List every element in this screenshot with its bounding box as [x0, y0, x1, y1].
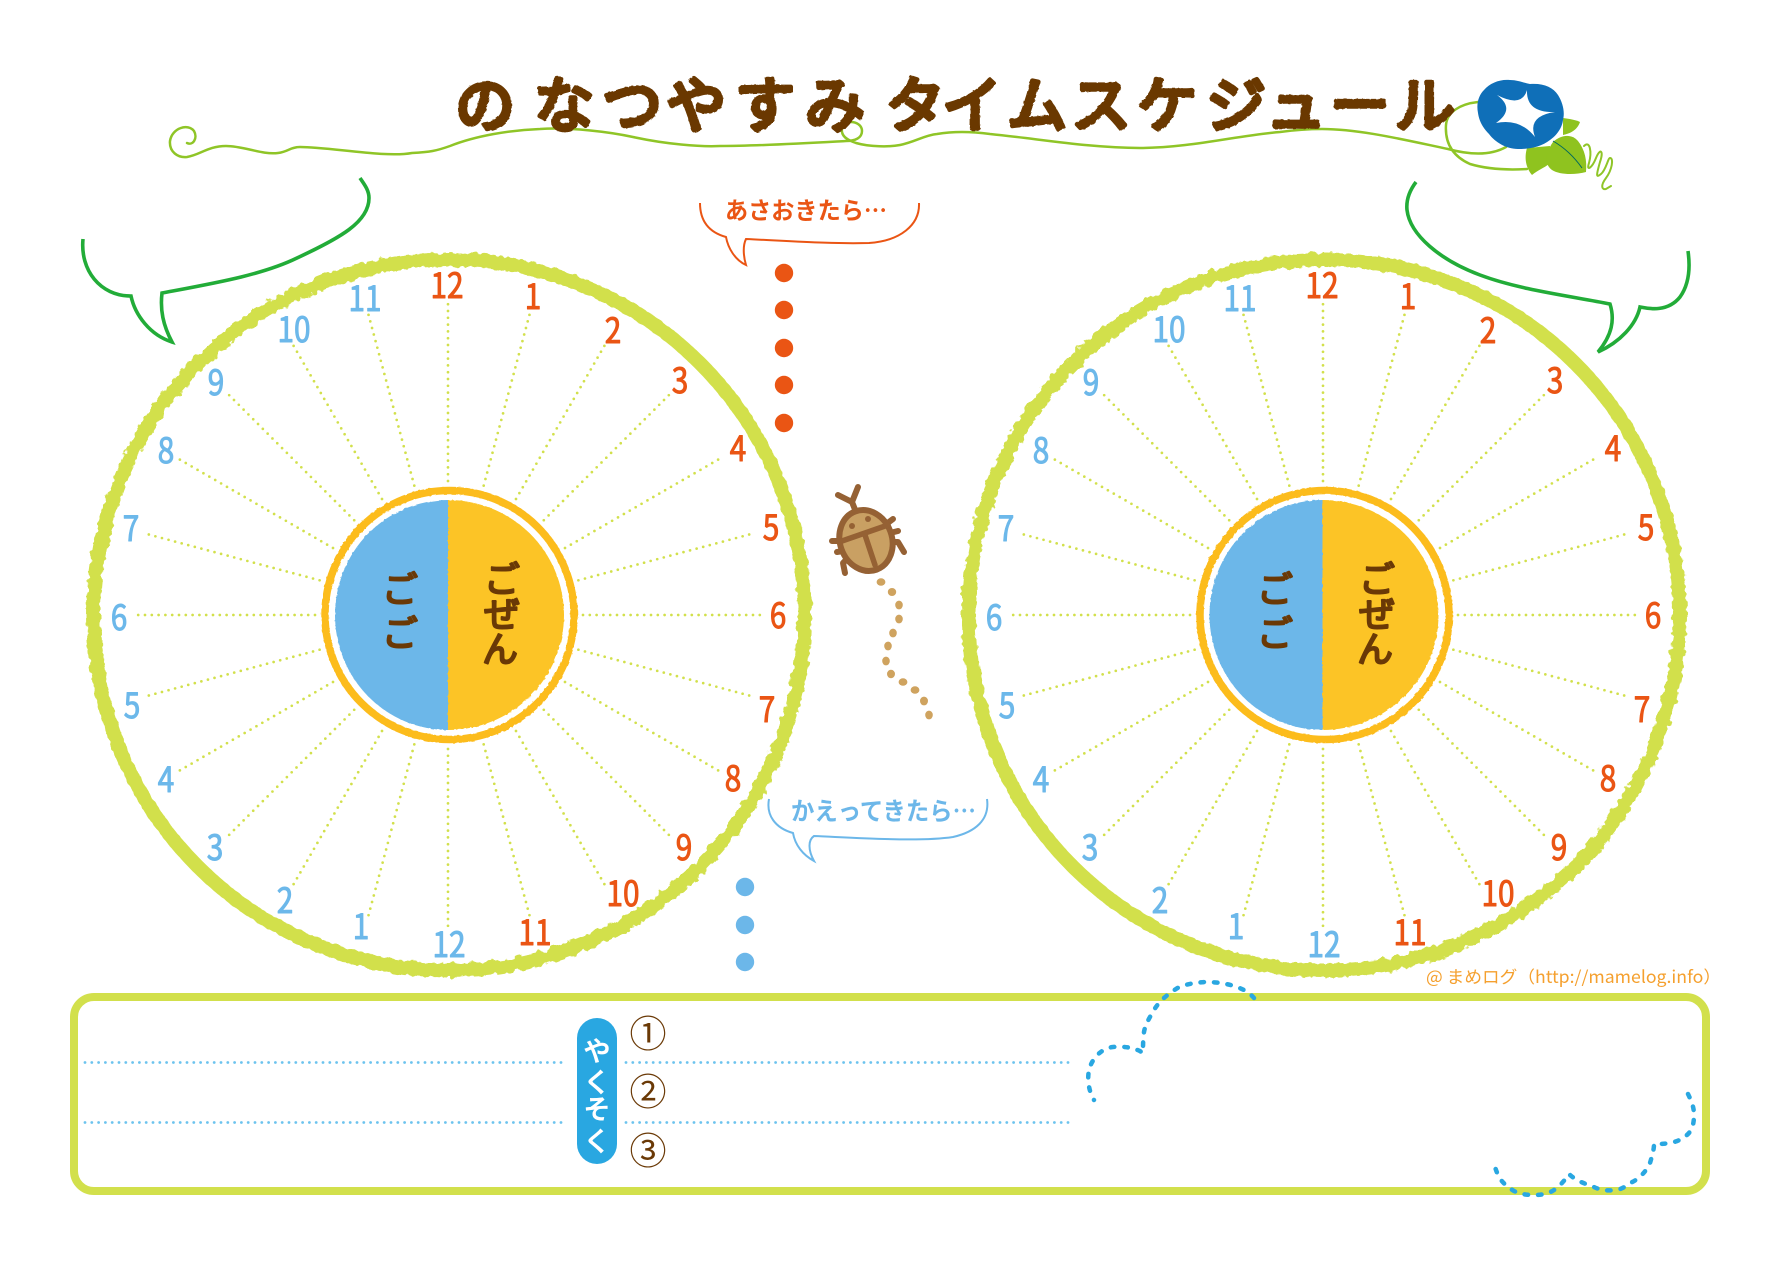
orange dots column [775, 264, 793, 432]
morning hour numbers: 8 [1600, 751, 1616, 802]
afternoon half disc [335, 500, 448, 730]
afternoon hour numbers [986, 271, 1341, 968]
afternoon hour numbers: 7 [998, 501, 1014, 552]
morning hour numbers [1305, 258, 1661, 956]
label: afternoon: ごご [382, 561, 418, 657]
number 1: ① [630, 1004, 666, 1058]
morning hour numbers: 12 [1305, 258, 1339, 309]
afternoon hour numbers: 4 [1033, 752, 1049, 803]
morning hour numbers: 12 [430, 258, 464, 309]
morning hour numbers: 8 [725, 751, 741, 802]
morning hour numbers: 11 [518, 905, 552, 956]
morning hour numbers: 6 [1645, 588, 1661, 639]
number 3: ③ [630, 1121, 666, 1175]
afternoon hour numbers: 10 [277, 302, 311, 353]
dotted cloud bottom [1495, 1094, 1694, 1195]
morning hour numbers: 9 [676, 820, 692, 871]
morning hour numbers: 3 [672, 353, 688, 404]
callout: after returning home: かえってきたら… [791, 792, 976, 828]
afternoon hour numbers: 12 [432, 917, 466, 968]
morning hour numbers: 9 [1551, 820, 1567, 871]
label: morning: ごぜん [1357, 551, 1395, 673]
afternoon hour numbers: 8 [158, 423, 174, 474]
afternoon hour numbers: 5 [124, 678, 140, 729]
afternoon hour numbers: 3 [207, 820, 223, 871]
afternoon hour numbers: 9 [208, 355, 224, 406]
morning hour numbers: 2 [1480, 303, 1496, 354]
morning hour numbers: 7 [1634, 682, 1650, 733]
callout: after returning home [768, 792, 987, 861]
afternoon hour numbers: 1 [1228, 899, 1244, 950]
afternoon hour numbers: 1 [353, 899, 369, 950]
callout: morning [700, 191, 919, 265]
morning hour numbers [430, 258, 786, 956]
centre ring [1200, 490, 1449, 740]
label: afternoon: ごご [1257, 561, 1293, 657]
morning hour numbers: 10 [606, 866, 640, 917]
morning hour numbers: 10 [1481, 866, 1515, 917]
morning hour numbers: 11 [1393, 905, 1427, 956]
morning hour numbers: 4 [1605, 421, 1621, 472]
morning hour numbers: 3 [1547, 353, 1563, 404]
afternoon hour numbers: 7 [123, 501, 139, 552]
icon: beetle [831, 487, 904, 579]
afternoon hour numbers: 11 [1223, 271, 1257, 322]
morning hour numbers: 4 [730, 421, 746, 472]
dotted hour spokes [1012, 303, 1636, 927]
clock outer ring [968, 260, 1680, 970]
afternoon hour numbers: 10 [1152, 302, 1186, 353]
centre ring [325, 490, 574, 740]
morning hour numbers: 5 [763, 500, 779, 551]
morning hour numbers: 7 [759, 682, 775, 733]
credit text: @ まめログ（http://mamelog.info） [1426, 963, 1721, 988]
afternoon hour numbers: 4 [158, 752, 174, 803]
dotted cloud top [1088, 982, 1254, 1100]
afternoon hour numbers: 9 [1083, 355, 1099, 406]
panel: right clock [968, 258, 1680, 970]
promise label pill: やくそく [584, 1030, 610, 1159]
morning hour numbers: 6 [770, 588, 786, 639]
icon: morning glory flower with leaves [1477, 80, 1586, 175]
beetle dotted trail [877, 578, 933, 719]
panel: left clock [94, 258, 804, 970]
afternoon half disc [1210, 500, 1322, 730]
callout: morning: あさおきたら… [725, 191, 887, 226]
dotted hour spokes [137, 303, 761, 927]
blue dots column [736, 878, 754, 971]
afternoon hour numbers: 12 [1307, 917, 1341, 968]
afternoon hour numbers: 5 [999, 678, 1015, 729]
label: morning: ごぜん [482, 551, 520, 673]
morning hour numbers: 2 [605, 303, 621, 354]
morning hour numbers: 1 [525, 269, 541, 320]
afternoon hour numbers: 2 [277, 873, 293, 924]
afternoon hour numbers [111, 271, 466, 968]
morning hour numbers: 5 [1638, 500, 1654, 551]
left blank speech bubble [83, 178, 369, 342]
title: の なつやすみ タイムスケジュール [455, 58, 1455, 145]
afternoon hour numbers: 6 [986, 590, 1002, 641]
afternoon hour numbers: 6 [111, 590, 127, 641]
afternoon hour numbers: 2 [1152, 873, 1168, 924]
promise label pill [577, 1018, 617, 1164]
clock outer ring [94, 260, 804, 970]
afternoon hour numbers: 11 [348, 271, 382, 322]
panel: promise box [74, 997, 1706, 1191]
afternoon hour numbers: 3 [1082, 820, 1098, 871]
right blank speech bubble [1407, 182, 1689, 352]
vine under the title [170, 102, 1612, 189]
morning half disc [448, 500, 564, 730]
number 2: ② [630, 1062, 666, 1116]
morning half disc [1322, 500, 1438, 730]
afternoon hour numbers: 8 [1033, 423, 1049, 474]
morning hour numbers: 1 [1400, 269, 1416, 320]
